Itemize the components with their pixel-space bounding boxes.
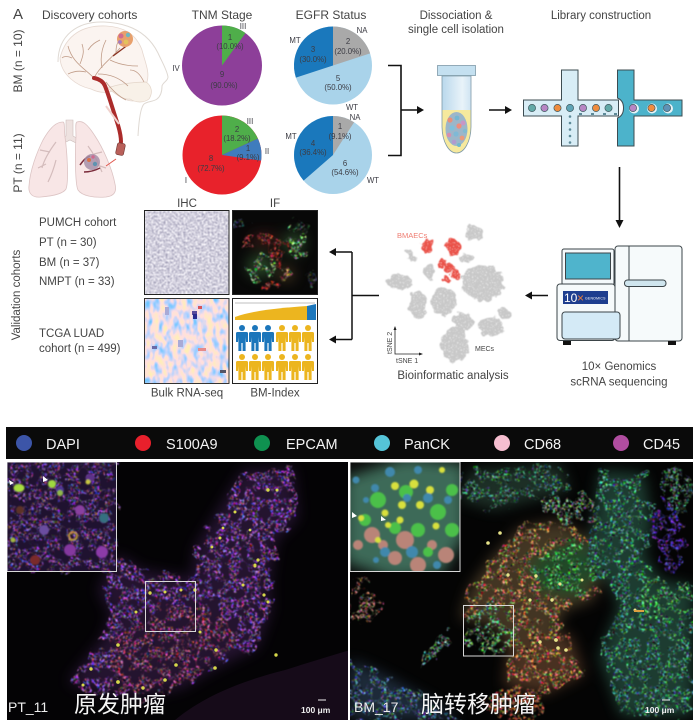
pie: BM TNM stage: (90.0%)	[210, 81, 238, 90]
label: bulk RNA-seq: Bulk RNA-seq	[151, 388, 223, 400]
pie: PT EGFR status: 4	[311, 139, 316, 148]
pie: PT EGFR status: (54.6%)	[331, 168, 359, 177]
zoom box	[146, 582, 196, 632]
caption: 10x Genomics: scRNA sequencing	[570, 376, 668, 388]
pie: PT EGFR status: WT	[367, 176, 379, 185]
label: BM-Index: BM-Index	[250, 388, 300, 400]
heading: dissociation: single cell isolation	[408, 24, 504, 36]
label: IHC: IHC	[177, 198, 197, 210]
heading: dissociation: Dissociation &	[420, 10, 492, 22]
heading: library construction: Library construction	[551, 10, 651, 22]
panel: BM-Index	[232, 298, 318, 384]
icon: 10x Genomics sequencer	[557, 246, 682, 345]
caption: 10x Genomics: 10× Genomics	[582, 361, 656, 373]
row label: PT: PT (n = 11)	[11, 133, 25, 193]
chart: tSNE plot: BMAECs	[397, 231, 428, 240]
panel: PT_11 primary tumour image	[6, 461, 350, 721]
chart: tSNE plot: tSNE 2	[387, 332, 394, 354]
legend bar: PanCK	[404, 437, 450, 453]
pie: PT EGFR status: NA	[350, 113, 361, 122]
panel: bulk RNA-seq heatmap	[144, 298, 229, 384]
legend bar: CD68	[524, 437, 561, 453]
pie: BM TNM stage: (10.0%)	[216, 42, 244, 51]
illustration: lungs	[29, 120, 116, 197]
tissue regions	[350, 464, 694, 720]
chart: tSNE plot: tSNE 1	[396, 358, 418, 365]
text: PUMCH cohort: PUMCH cohort	[39, 217, 116, 229]
pie: BM EGFR status: (30.0%)	[299, 55, 327, 64]
legend bar: DAPI	[46, 437, 80, 453]
panel: IHC	[144, 210, 229, 294]
arrow to bioinformatics	[525, 292, 548, 300]
caption: bioinformatic analysis: Bioinformatic analysis	[397, 370, 509, 382]
icon: microfluidic chip	[524, 70, 682, 146]
purple vessel	[647, 495, 687, 575]
pie: PT EGFR status: MT	[285, 132, 297, 141]
pie: PT TNM stage: (9.1%)	[237, 153, 260, 162]
pie: PT TNM stage: 1	[246, 144, 250, 153]
pie: BM TNM stage: 9	[220, 70, 224, 79]
row label: validation cohorts: Validation cohorts	[11, 249, 23, 340]
pie: PT TNM stage: (18.2%)	[223, 134, 251, 143]
yellow cell highlights	[82, 488, 278, 690]
bright cell highlights	[486, 531, 636, 652]
pie: PT TNM stage: I	[185, 176, 187, 185]
pie: BM TNM stage: IV	[172, 64, 180, 73]
panel: BM_17 brain metastasis image	[345, 458, 694, 721]
tissue section	[68, 468, 298, 700]
pie: BM EGFR status: NA	[357, 26, 368, 35]
pie: PT EGFR status: WT	[346, 103, 358, 112]
pie: PT TNM stage: III	[247, 117, 253, 126]
illustration: head, brain and circulation	[58, 22, 168, 156]
label: IF: IF	[270, 198, 280, 210]
pie: BM EGFR status: (50.0%)	[324, 83, 352, 92]
text: PUMCH cohort: BM (n = 37)	[39, 257, 100, 269]
pie: PT TNM stage	[182, 116, 269, 194]
label: PT_11: PT_11	[8, 699, 48, 715]
pie: PT EGFR status: (36.4%)	[299, 148, 327, 157]
pie: BM EGFR status: (20.0%)	[334, 47, 362, 56]
chart: tSNE plot	[387, 226, 512, 365]
pie: PT EGFR status: 1	[338, 122, 342, 131]
icon: 10x Genomics sequencer: ×	[577, 291, 584, 305]
inset: BM_17 magnified	[350, 462, 460, 572]
pie: PT EGFR status	[285, 103, 379, 194]
scale bar	[645, 700, 675, 715]
row label: BM: BM (n = 10)	[11, 29, 25, 93]
icon: 10x Genomics sequencer: GENOMICS	[585, 296, 606, 300]
panel: IF	[232, 210, 318, 294]
bracket arrows to validation panels	[329, 248, 379, 344]
faint lower tissue	[175, 650, 350, 720]
text: PUMCH cohort: PT (n = 30)	[39, 237, 97, 249]
pie: BM EGFR status: 5	[336, 74, 341, 83]
scale bar	[301, 700, 331, 715]
legend bar	[6, 427, 693, 459]
arrow to chip	[489, 106, 512, 114]
pie: BM TNM stage: III	[240, 22, 246, 31]
text: TCGA LUAD cohort: TCGA LUAD	[39, 328, 104, 340]
heading: TNM stage: TNM Stage	[192, 8, 253, 22]
label: BM_17: BM_17	[354, 699, 399, 715]
label: brain metastasis: 脑转移肿瘤	[421, 691, 536, 717]
pie: BM TNM stage: 1	[228, 33, 232, 42]
arrow down to sequencer	[616, 167, 624, 228]
zoom box	[464, 606, 514, 656]
icon: 10x Genomics sequencer: 10	[564, 291, 578, 305]
pie: BM EGFR status: MT	[289, 36, 301, 45]
bracket arrow to tube	[388, 66, 424, 156]
pie: PT EGFR status: 6	[343, 159, 347, 168]
pie: BM EGFR status: 3	[311, 45, 315, 54]
pie: PT TNM stage: 8	[209, 154, 213, 163]
text: PUMCH cohort: NMPT (n = 33)	[39, 276, 115, 288]
scale bar: 100 μm	[301, 705, 331, 715]
chart: tSNE plot: MECs	[475, 346, 495, 353]
pie: PT TNM stage: (72.7%)	[197, 164, 225, 173]
text: TCGA LUAD cohort: cohort (n = 499)	[39, 343, 121, 355]
legend bar: CD45	[643, 437, 680, 453]
panel label A: A	[13, 6, 23, 23]
heading: discovery cohorts: Discovery cohorts	[42, 8, 137, 22]
label: primary tumour: 原发肿瘤	[74, 691, 166, 717]
pie: PT EGFR status: (9.1%)	[329, 132, 352, 141]
legend bar: EPCAM	[286, 437, 338, 453]
pie: BM EGFR status: 2	[346, 37, 350, 46]
pie: BM TNM stage	[172, 22, 262, 106]
pie: BM EGFR status	[289, 26, 372, 104]
icon: centrifuge tube	[438, 66, 476, 156]
pie: PT TNM stage: II	[265, 147, 269, 156]
pie: PT TNM stage: 2	[235, 125, 239, 134]
legend bar: S100A9	[166, 437, 218, 453]
tissue undertone	[68, 468, 298, 696]
tissue undertone	[350, 464, 693, 720]
inset: PT_11 magnified	[7, 462, 116, 572]
heading: EGFR status: EGFR Status	[296, 8, 366, 22]
scale bar: 100 μm	[645, 705, 675, 715]
